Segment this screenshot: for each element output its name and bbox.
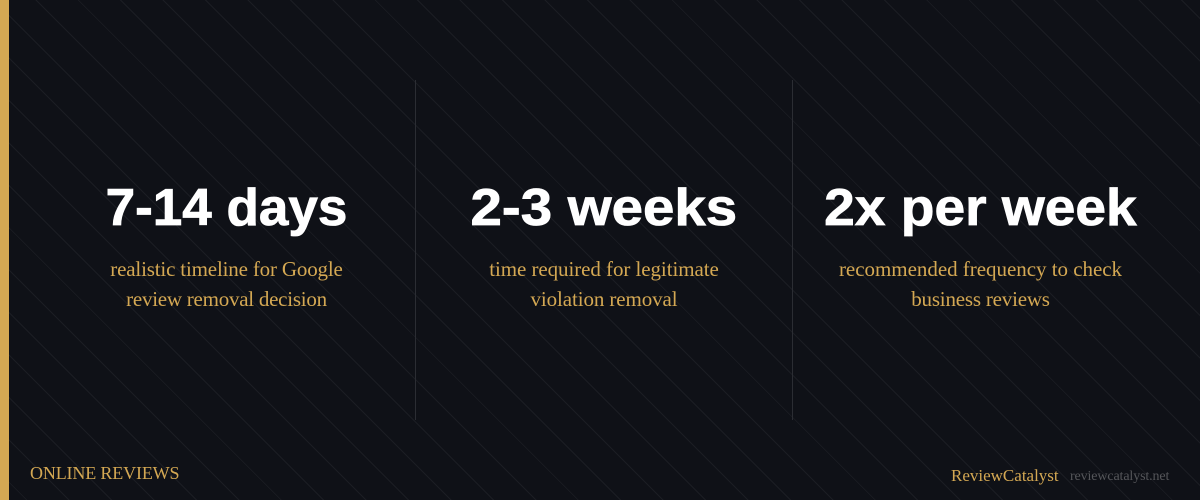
panel: 7-14 days — [106, 179, 347, 311]
panel divider — [792, 80, 793, 420]
stat description: review removal decision — [126, 287, 327, 311]
gold accent bar — [0, 0, 9, 500]
stat value: 2-3 weeks — [471, 179, 737, 237]
footer brand name: ReviewCatalyst — [951, 466, 1059, 485]
stat description: realistic timeline for Google — [110, 257, 343, 281]
stat description: business reviews — [911, 287, 1050, 311]
panel divider — [415, 80, 416, 420]
footer website: reviewcatalyst.net — [1070, 469, 1169, 484]
panel: 2x per week — [824, 179, 1138, 311]
stat value: 7-14 days — [106, 179, 347, 237]
footer category label: ONLINE REVIEWS — [30, 463, 179, 483]
panel: 2-3 weeks — [471, 179, 737, 311]
stat description — [110, 257, 343, 311]
stat description — [489, 257, 719, 311]
stat value: 2x per week — [824, 179, 1137, 237]
stat description: time required for legitimate — [489, 257, 719, 281]
stat description — [839, 257, 1122, 311]
stat description: recommended frequency to check — [839, 257, 1122, 281]
stat description: violation removal — [530, 287, 678, 311]
